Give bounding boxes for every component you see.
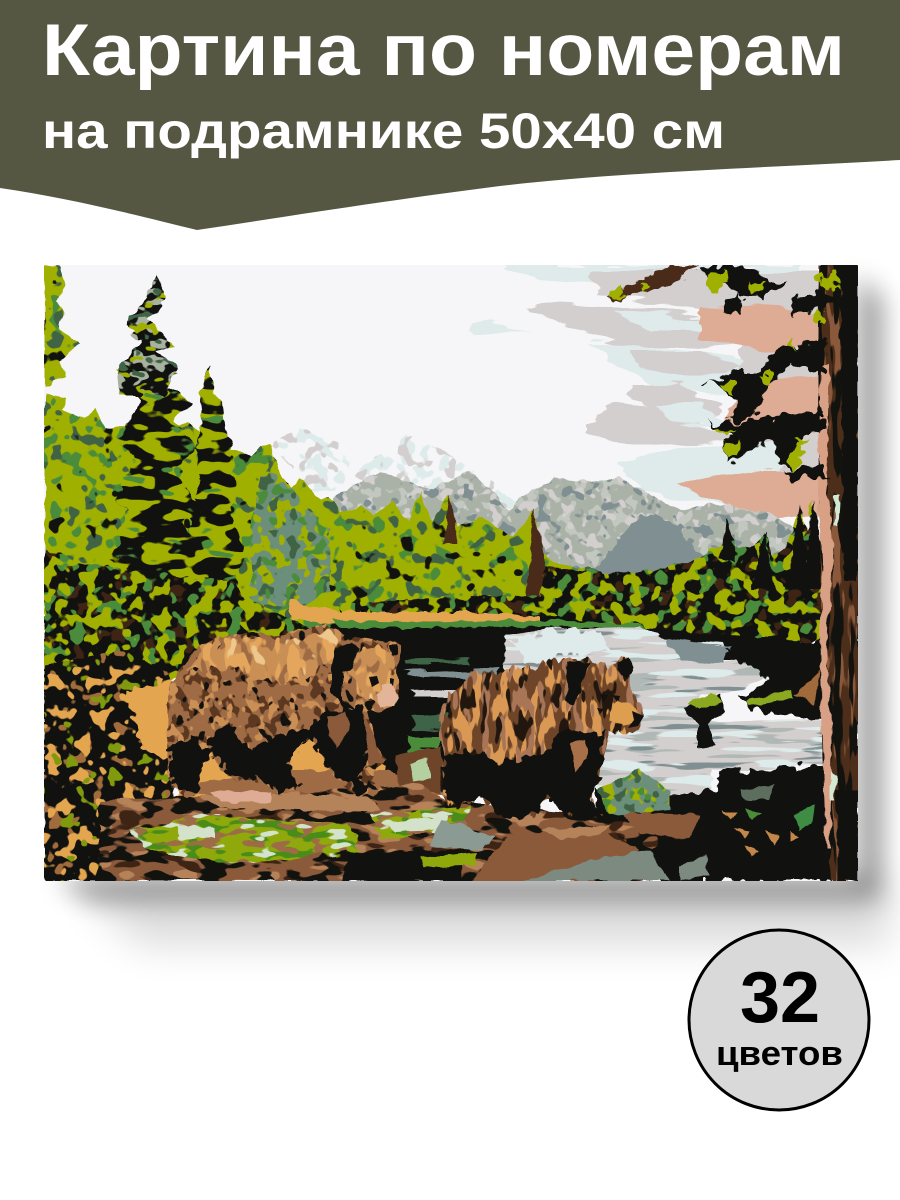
lower branch [705,410,825,470]
reddish fir [443,495,545,605]
snowy mountain peaks [272,428,516,510]
dark lower forest mass [44,550,340,720]
black spruces right [720,500,828,590]
top left branch [605,265,700,303]
bear 1 ear and neck [332,642,397,712]
black left lake bank [300,657,506,775]
right bank and far shore [595,640,858,881]
grass by bear 2 [598,770,670,815]
canvas drop shadow [55,275,890,945]
bear 2 muzzle [610,700,640,726]
bear 2 eyes [597,694,620,714]
badge: 32 colours [689,930,869,1110]
ground behind bear legs [174,739,444,798]
bear 2 black lower body [442,728,607,820]
tree trunk [818,265,858,881]
trunk pink strip [818,365,834,850]
slate mountain slope [592,513,704,574]
pale lichen on trunk [830,495,840,800]
top right branch [700,265,840,315]
header banner [0,0,900,230]
pale lake reflection [510,630,610,662]
title: Картина по номерам [42,10,845,91]
overhanging branches [605,265,840,480]
bear 2 shoulder patch [570,740,587,772]
bear 2 (right) [438,658,644,820]
bear 1 black belly and legs [170,708,378,794]
lime foliage on branches [608,268,838,470]
trunk black side [836,265,858,881]
bear 1 (left) [167,625,400,797]
sky [44,265,858,881]
bear 1 front leg highlight [325,712,382,765]
trunk base [818,265,858,881]
subtitle: на подрамнике 50х40 см [42,103,725,159]
bear 2 ear and neck [566,658,632,705]
bear 1 eyes [369,676,394,687]
slate lake patch [665,640,730,662]
right dark forest [540,500,830,650]
middle branch [705,340,825,422]
badge circle [689,930,869,1110]
small orange marks and rocks on right [680,785,815,881]
second spruce [189,366,244,586]
lake [500,628,830,800]
left undergrowth orange [44,650,175,881]
orange bush behind bear [125,680,175,760]
dark forest base [340,594,542,617]
painting: bears by a mountain lake [44,265,858,881]
far mountains [333,470,794,574]
sage green tree group [250,470,330,610]
left undergrowth lime foliage [84,564,245,620]
bear 1 light back fur [184,631,338,684]
ground [100,785,660,881]
main forest [44,392,603,630]
clouds [470,265,835,520]
bear 2 nose [628,711,644,728]
tall spruce top [118,275,178,395]
badge caption: цветов [716,1035,843,1073]
low branch knot [780,465,828,480]
tall spruce left [110,370,196,578]
mossy rock in water [682,670,820,748]
lake streaks at bank [400,658,500,750]
bear 1 body [167,625,400,797]
left edge tree [44,265,80,385]
bear 2 body [438,658,643,820]
shoreline [290,600,800,660]
bear 1 muzzle [378,684,399,708]
badge number: 32 [740,958,820,1038]
bear 1 head [348,646,396,702]
ground moss patches [130,790,700,881]
